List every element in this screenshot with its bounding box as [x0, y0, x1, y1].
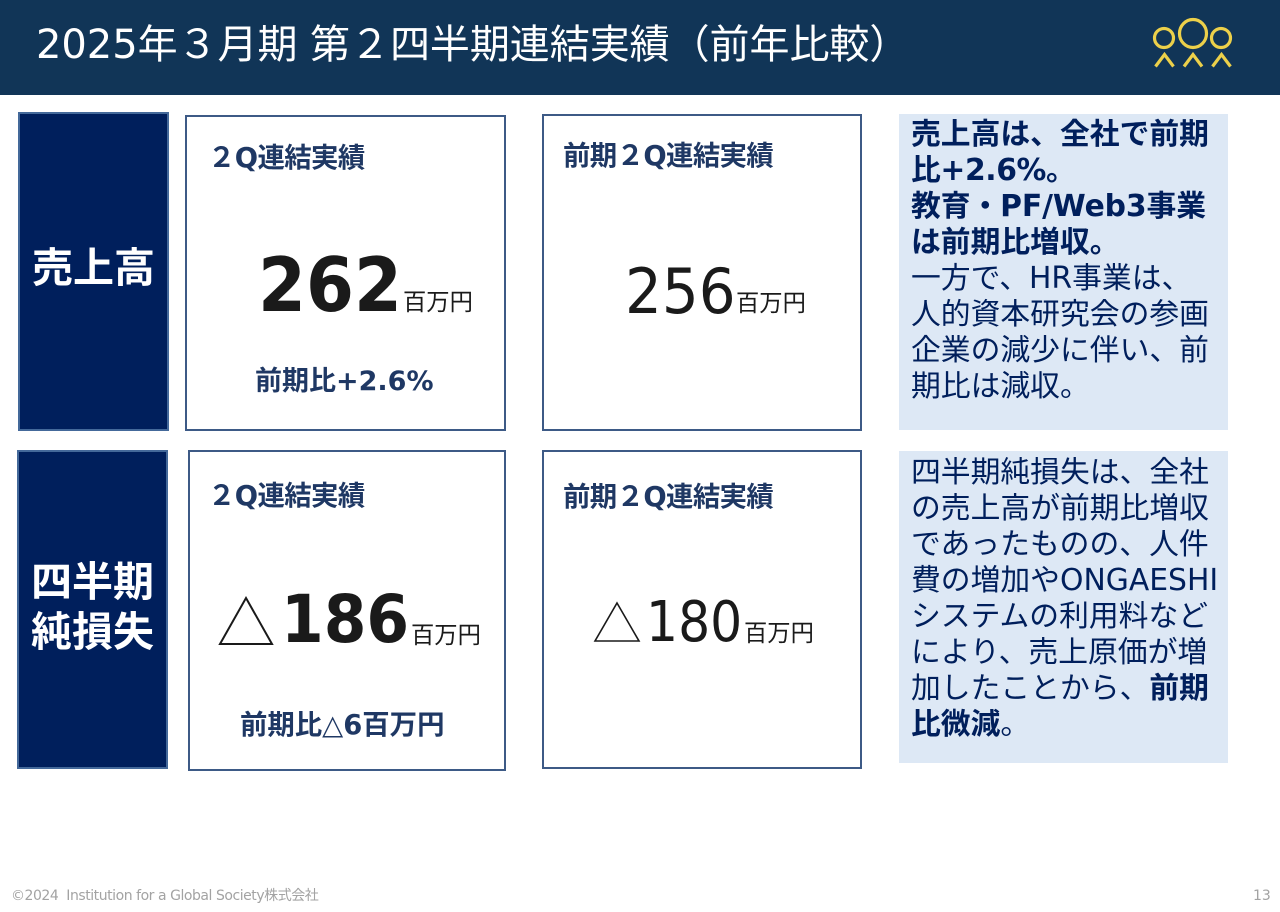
unit: 百万円 [736, 290, 806, 317]
page number: 13 [1253, 888, 1271, 904]
icon: triangle [594, 602, 640, 642]
unit: 百万円 [744, 620, 814, 647]
panel: loss label [17, 450, 168, 769]
footer copyright: ©2024 Institution for a Global Society株式会社 [11, 888, 318, 904]
unit: 百万円 [403, 289, 473, 316]
comparison: 前期比+2.6% [255, 366, 434, 397]
note text: 加したことから、前期 [911, 671, 1209, 706]
comparison: 前期比△6百万円 [240, 710, 444, 741]
note text: は前期比増収。 [911, 225, 1120, 260]
panel: loss prior [542, 450, 862, 769]
note text [911, 117, 1209, 404]
note text: 期比は減収。 [911, 369, 1090, 404]
note text [911, 455, 1218, 742]
icon: company logo [1152, 18, 1232, 68]
note text: 比+2.6%。 [911, 153, 1075, 188]
panel: loss current [188, 450, 506, 771]
panel: sales current [185, 115, 506, 431]
heading: current quarter: ２Q連結実績 [208, 481, 365, 512]
panel: loss note [899, 451, 1228, 763]
heading: prior quarter: 前期２Q連結実績 [563, 141, 773, 172]
note text: 比微減。 [911, 707, 1030, 742]
note text: 教育・PF/Web3事業 [911, 189, 1206, 224]
panel: sales note [899, 114, 1228, 430]
note text: 人的資本研究会の参画 [911, 297, 1209, 332]
note text: 四半期純損失は、全社 [911, 455, 1209, 490]
header bar [0, 0, 1280, 95]
value: 262: 262 [258, 241, 402, 329]
note text: 売上高は、全社で前期 [911, 117, 1209, 152]
heading: quarterly net loss: 四半期 [31, 558, 154, 606]
note text: の売上高が前期比増収 [911, 491, 1209, 526]
panel: sales label [18, 112, 169, 431]
heading: quarterly net loss [31, 558, 154, 656]
heading: sales: 売上高 [32, 244, 155, 292]
note text: により、売上原価が増 [911, 635, 1207, 670]
value: 186: 186 [281, 581, 409, 658]
note text: システムの利用料など [911, 599, 1208, 634]
panel: sales prior [542, 114, 862, 431]
value: 256: 256 [625, 255, 736, 328]
heading: quarterly net loss: 純損失 [31, 608, 154, 656]
heading: prior quarter: 前期２Q連結実績 [563, 482, 773, 513]
note text: 一方で、HR事業は、 [911, 261, 1191, 296]
icon: triangle [218, 596, 274, 645]
title: 2025年３月期 第２四半期連結実績（前年比較） [36, 22, 909, 68]
heading: current quarter: ２Q連結実績 [208, 143, 365, 174]
note text: 費の増加やONGAESHI [911, 563, 1218, 598]
value: 180: 180 [646, 590, 742, 655]
note text: であったものの、人件 [911, 527, 1209, 562]
note text: 企業の減少に伴い、前 [911, 333, 1209, 368]
unit: 百万円 [411, 622, 481, 649]
